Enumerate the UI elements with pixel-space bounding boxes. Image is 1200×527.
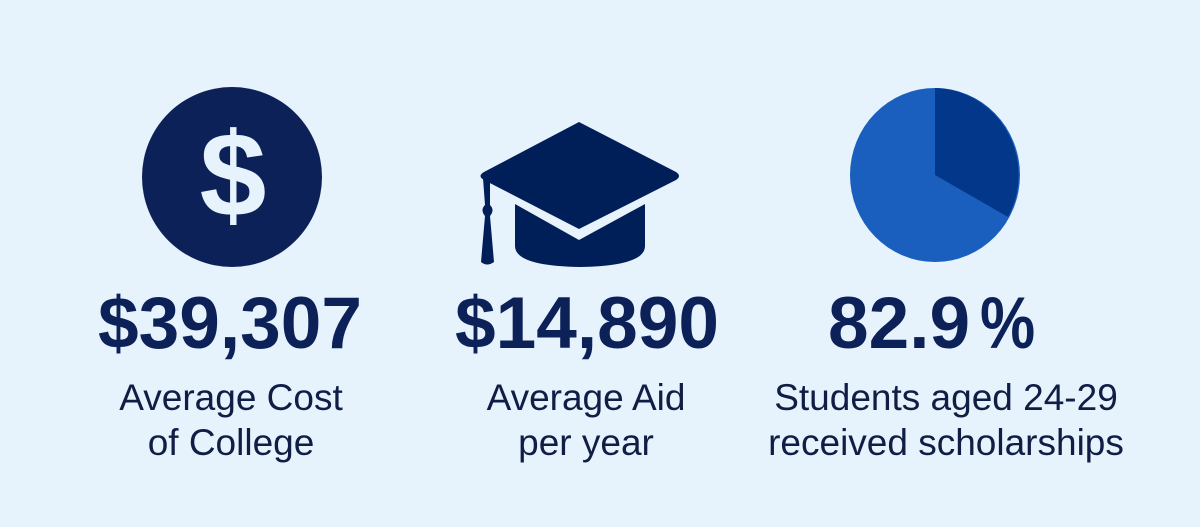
icon: dollar coin [142, 87, 322, 267]
stat: scholarships: Students aged 24-29 [774, 377, 1118, 418]
stat: average aid: $14,890 [455, 283, 719, 364]
icon: graduation cap [480, 122, 679, 267]
stat: average cost: of College [148, 422, 314, 463]
stat: average cost: Average Cost [119, 377, 343, 418]
stat: scholarships [768, 283, 1124, 463]
stat: average cost: $39,307 [98, 283, 362, 364]
stat: scholarships: % [980, 283, 1035, 364]
stat: scholarships: 82.9 [828, 283, 970, 364]
stat: scholarships: received scholarships [768, 422, 1124, 463]
icon: dollar coin: $ [200, 108, 266, 242]
stat: average aid [455, 283, 719, 463]
stat: average cost [98, 283, 362, 463]
pie chart [850, 88, 1020, 262]
stat: average aid: Average Aid [487, 377, 685, 418]
stat: average aid: per year [518, 422, 654, 463]
